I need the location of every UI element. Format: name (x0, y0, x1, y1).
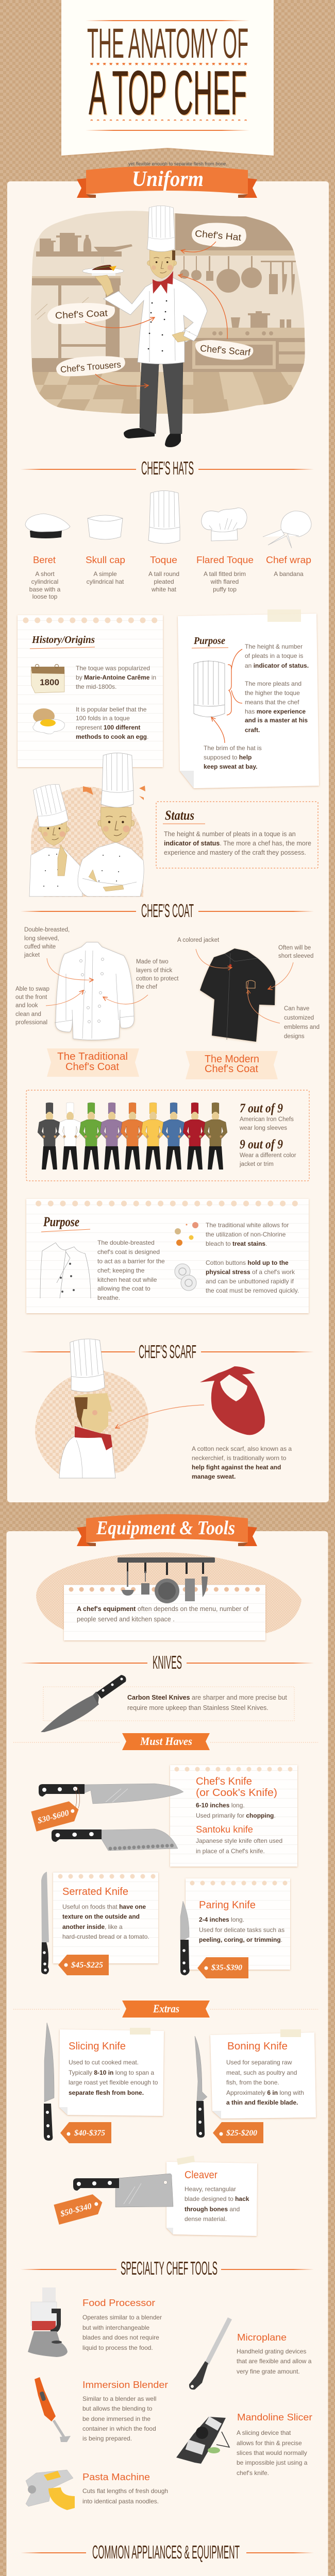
note: cleaver: dense material. (185, 2215, 227, 2223)
icon: cleaver knife (73, 2174, 173, 2207)
hat types (25, 490, 311, 600)
text: scarf description: help fight against the heat and (192, 1464, 281, 1471)
left chef (29, 783, 82, 896)
panel: coat purpose note: Purpose (43, 1214, 79, 1229)
hat descriptions: pleated (154, 578, 174, 585)
coat callouts: long sleeved, (24, 936, 59, 942)
hat (147, 206, 175, 251)
tool: mandoline slicer: chef's knife. (237, 2469, 269, 2477)
illustration: two chefs (29, 753, 145, 897)
heading: chef's coat: CHEF'S COAT (141, 900, 194, 921)
coat callouts: Double-breasted, (24, 927, 70, 933)
panel: history/origins note: methods to cook an egg. (76, 733, 148, 740)
callout: chef's hat (181, 223, 246, 252)
text: scarf description (192, 1445, 292, 1480)
tool: immersion blender (35, 2377, 168, 2442)
coat callouts: jacket (24, 952, 40, 958)
hat names: Beret (33, 555, 56, 565)
panel: coat purpose note (26, 1199, 309, 1313)
callout: chef's trousers: Chef's Trousers (60, 360, 122, 375)
note: slicing knife: Typically 8-10 in long to span a (69, 2069, 154, 2076)
panel: coat purpose note: allowing the coat to (97, 1285, 150, 1292)
right chef (78, 753, 144, 896)
note: chef's knife and santoku (170, 1765, 297, 1867)
illustration: traditional coat (55, 942, 134, 1040)
panel: purpose note: means that the chef (245, 699, 299, 706)
callout: status: experience and mastery of the craft they possess. (164, 849, 306, 856)
note: cleaver: Heavy, rectangular (185, 2185, 236, 2193)
hat descriptions: base with a (29, 586, 61, 593)
panel: history/origins note (18, 615, 163, 767)
banner: modern coat: The Modern (205, 1054, 259, 1065)
hat descriptions: A tall round (148, 570, 179, 578)
note: chef's knife and santoku: Chef's Knife (196, 1776, 252, 1787)
note: serrated knife: texture on the outside and (62, 1913, 140, 1920)
panel: coat purpose note: Cotton buttons hold up to the (206, 1259, 289, 1266)
icon: skull cap (88, 515, 123, 539)
equipment intro: A chef's equipment often depends on the menu, number of (77, 1605, 249, 1613)
panel: coat purpose note: The traditional white allows for (206, 1222, 289, 1229)
icon: paring knife (180, 1901, 190, 1975)
note: serrated knife: another inside, like a (62, 1923, 123, 1930)
panel: history/origins note: The toque was popularized (76, 665, 150, 672)
note: boning knife: Used for separating raw (226, 2059, 292, 2066)
heading: chef's scarf: CHEF'S SCARF (139, 1341, 196, 1362)
note: serrated knife: hard-crusted bread or a tomato. (62, 1933, 149, 1940)
hat descriptions: white hat (151, 586, 177, 593)
tool: immersion blender: Immersion Blender (82, 2380, 168, 2390)
note: chef's knife and santoku: Santoku knife (196, 1824, 253, 1835)
tool: mandoline slicer: be impossible just using a (237, 2459, 308, 2466)
panel: coat purpose note: kitchen heat out while (97, 1276, 157, 1283)
price tag: 35-390 (197, 1957, 248, 1978)
panel: equipment and tools (6, 1531, 328, 2576)
coat callouts: Able to swap (15, 986, 49, 992)
tool: immersion blender: be done immersed in the (82, 2415, 150, 2422)
panel: coat purpose note: physical stress of a chef's work (206, 1268, 295, 1276)
price tag: 25-200 (213, 2122, 263, 2143)
icon: calendar (31, 665, 64, 693)
price tag: 45-225 (58, 1955, 109, 1975)
coat callouts: customized (284, 1015, 314, 1021)
icon: utensil rack (118, 1557, 215, 1603)
hat descriptions: A bandana (274, 570, 304, 578)
hat descriptions: loose top (32, 593, 58, 600)
hero kitchen scene (26, 206, 314, 417)
note: slicing knife: Used to cut cooked meat. (69, 2059, 139, 2066)
trousers (140, 361, 183, 434)
note: paring knife: Paring Knife (199, 1900, 256, 1911)
coat callouts: professional (15, 1020, 47, 1026)
head (147, 250, 177, 279)
ribbon: uniform: Uniform (132, 167, 204, 191)
tool: microplane: very fine grate amount. (237, 2368, 300, 2375)
plate and steak (82, 268, 124, 274)
note: boning knife: a thin and flexible blade. (226, 2099, 298, 2106)
price tag: 25-200: $25-$200 (226, 2129, 257, 2138)
illustration: modern black coat (200, 948, 275, 1042)
heading: knives: KNIVES (153, 1652, 182, 1673)
banner: modern coat (186, 1051, 278, 1079)
coat callouts (15, 927, 320, 1040)
panel: history/origins note: It is popular belief that the (76, 706, 147, 713)
note: serrated knife (41, 1872, 158, 1975)
note: slicing knife: large roast yet flexible enough to (69, 2079, 158, 2086)
tool: food processor: liquid to process the food. (82, 2344, 153, 2351)
callout: chef's coat: Chef's Coat (55, 308, 108, 321)
tool: pasta machine: Pasta Machine (82, 2472, 150, 2482)
note: serrated knife: Useful on foods that have one (62, 1903, 146, 1910)
note: chef's knife and santoku: in place of a Chef's knife. (196, 1848, 265, 1855)
callout: chef's coat (47, 303, 155, 328)
icon: serrated knife (41, 1872, 49, 1974)
hat names (33, 555, 311, 565)
panel: purpose note: of pleats in a toque is (245, 652, 303, 659)
panel: history/origins note: 100 folds in a toque (76, 715, 130, 722)
panel: uniform (7, 181, 329, 1502)
divider banner: extras: Extras (153, 2002, 179, 2015)
note: paring knife: peeling, coring, or trimming. (199, 1936, 282, 1943)
note: cleaver: blade designed to hack (185, 2195, 249, 2202)
coat callouts: emblems and (284, 1024, 320, 1030)
coat callouts: designs (284, 1033, 305, 1040)
note: chef's knife and santoku: 6-10 inches long. (196, 1802, 245, 1809)
equipment intro: people served and kitchen space . (77, 1616, 175, 1623)
panel: purpose note: an indicator of status. (245, 662, 309, 669)
note: slicing knife (44, 2023, 164, 2143)
callout: carbon steel knives: require more upkeep than Stainless Steel Knives. (127, 1704, 269, 1711)
equipment intro (36, 1552, 301, 1640)
panel: coat purpose note: bleach to treat stains. (206, 1240, 267, 1247)
tool: food processor: blades and does not require (82, 2334, 159, 2341)
panel: purpose note: Purpose (193, 635, 225, 647)
icon: toque sketch (194, 660, 225, 717)
icon: flared toque (202, 508, 247, 541)
banner: traditional coat: The Traditional (57, 1051, 128, 1062)
tool: microplane: Handheld grating devices (237, 2348, 306, 2355)
icon: toque (148, 490, 180, 544)
icon: slicing knife (44, 2023, 54, 2141)
callout: chef's scarf: Chef's Scarf (199, 343, 252, 358)
callout: status: indicator of status. The more a chef has, the more (164, 840, 311, 847)
illustration: profile chef with scarf (35, 1338, 204, 1478)
hat descriptions (29, 570, 304, 600)
tool: food processor: Operates similar to a blender (82, 2314, 162, 2321)
tool: food processor: but with interchangeable (82, 2324, 149, 2331)
panel: purpose note: the higher the toque (245, 689, 300, 697)
tool: pasta machine: Cuts flat lengths of fresh dough (82, 2487, 168, 2495)
panel: history/origins note: represent 100 different (76, 724, 140, 731)
shoes (124, 428, 181, 447)
panel: iron chefs: jacket or trim (239, 1161, 274, 1167)
divider banner: extras (13, 2001, 318, 2018)
panel: coat purpose note: chef's coat is designed (97, 1248, 160, 1256)
note: paring knife: 2-4 inches long. (199, 1916, 244, 1923)
panel: coat purpose note: the utilization of non-Chlorine (206, 1231, 286, 1238)
callout: status: Status (165, 808, 194, 823)
hat descriptions: A tall fitted brim (204, 570, 246, 578)
note: boning knife: Boning Knife (227, 2041, 288, 2052)
tool: immersion blender: container in which the food (82, 2425, 156, 2432)
panel: coat purpose note: to act as a barrier for the (97, 1258, 165, 1265)
callout: carbon steel knives: Carbon Steel Knives are sharper and more precise but (127, 1694, 287, 1701)
callout: status: The height & number of pleats in a toque is an (164, 831, 296, 838)
hat descriptions: puffy top (213, 586, 237, 593)
ribbon: uniform (77, 166, 257, 198)
icon: buttons (175, 1264, 196, 1291)
text: scarf description: manage sweat. (192, 1473, 236, 1480)
callout: chef's hat: Chef's Hat (194, 228, 242, 243)
tool: immersion blender: Similar to a blender as well (82, 2395, 156, 2402)
price tag: 40-375 (60, 2122, 111, 2143)
hat descriptions: cylindrical (31, 578, 58, 585)
heading: chef's hats: CHEF'S HATS (141, 457, 194, 479)
panel: coat purpose note: breathe. (97, 1294, 120, 1301)
hat names: Flared Toque (196, 555, 254, 565)
divider banner: must haves: Must Haves (140, 1735, 192, 1748)
panel: history/origins note: History/Origins (31, 634, 95, 646)
banner: modern coat: Chef's Coat (205, 1063, 258, 1075)
note: serrated knife: Serrated Knife (62, 1886, 128, 1897)
note: boning knife: fish, from the bone. (226, 2079, 279, 2086)
price tag: 50-340 (54, 2193, 105, 2225)
ribbon: equipment and tools: Equipment & Tools (96, 1517, 235, 1539)
tool: pasta machine: into identical pasta noodles. (82, 2498, 159, 2505)
hat names: Skull cap (86, 555, 125, 565)
tool: microplane (189, 2318, 312, 2389)
coat callouts: clean and (15, 1011, 41, 1018)
stray caption: yet flexible enough to separate flesh from bone. (128, 161, 227, 166)
note: slicing knife: separate flesh from bone. (69, 2089, 144, 2096)
tool: mandoline slicer: Mandoline Slicer (237, 2412, 312, 2422)
text: scarf description: A cotton neck scarf, also known as a (192, 1445, 292, 1452)
panel: iron chefs: 7 out of 9 (240, 1101, 283, 1115)
panel: purpose note: supposed to help (204, 754, 252, 761)
tool: immersion blender: is being prepared. (82, 2435, 132, 2442)
hat descriptions: A simple (93, 570, 117, 578)
note: paring knife: Used for delicate tasks such as (199, 1926, 284, 1934)
coat callouts: Often will be (278, 945, 311, 951)
coat callouts: cotton to protect (136, 976, 179, 982)
panel: iron chefs (26, 1090, 309, 1181)
callout: chef's trousers (56, 356, 148, 386)
coat callouts: cuffed white (24, 944, 56, 950)
tool: microplane: Microplane (237, 2332, 287, 2343)
icon: chef knife diagonal (41, 1675, 126, 1732)
panel: purpose note: The height & number (245, 643, 303, 650)
icon: egg (33, 708, 64, 734)
panel: history/origins note: by Marie-Antoine Carême in (76, 674, 156, 681)
divider banner: must haves (13, 1733, 318, 1750)
right hand (172, 332, 190, 342)
icon: santoku knife (52, 1829, 178, 1851)
panel: purpose note: The more pleats and (245, 680, 301, 687)
price tag: 30-600 (31, 1800, 81, 1832)
icon: chef wrap (263, 511, 311, 548)
note: chef's knife and santoku: Used primarily for chopping. (196, 1812, 276, 1819)
panel: purpose note: keep sweat at bay. (204, 763, 258, 770)
row of nine chefs (38, 1103, 227, 1170)
coat callouts: and look (15, 1003, 38, 1009)
icon: boning knife (195, 2036, 207, 2138)
panel: coat purpose note: chef; keeping the (97, 1267, 145, 1274)
coat (104, 278, 207, 364)
coat callouts: Made of two (136, 959, 169, 965)
coat callouts: the chef (136, 984, 158, 990)
text: scarf description: neckerchief, is traditionally worn to (192, 1454, 287, 1462)
panel: coat purpose note: and can be unbuttoned rapidly if (206, 1278, 294, 1285)
icon: bandana (200, 1366, 265, 1435)
brace and arrows (227, 649, 242, 715)
panel: purpose note (178, 609, 319, 788)
tool: mandoline slicer (176, 2412, 312, 2477)
note: chef's knife and santoku: (or Cook's Knife) (196, 1787, 277, 1799)
note: boning knife (195, 2029, 316, 2143)
tool: microplane: that are flexible and allow a (237, 2358, 312, 2365)
panel: purpose note: craft. (245, 726, 260, 734)
icon: coat sketch (40, 1243, 91, 1298)
panel: iron chefs: 9 out of 9 (240, 1138, 283, 1151)
coat callouts: out the front (15, 994, 47, 1001)
title card (61, 0, 274, 156)
coat callouts: A colored jacket (177, 937, 220, 943)
tool: mandoline slicer: slices that would normally (237, 2449, 307, 2456)
price tag: 35-390: $35-$390 (211, 1963, 242, 1972)
panel: purpose note: and is a master at his (245, 717, 308, 724)
price tag: 30-600: $30-$600 (36, 1809, 70, 1825)
note: cleaver (54, 2156, 257, 2236)
note: chef's knife and santoku: Japanese style knife often used (196, 1837, 282, 1844)
hat descriptions: cylindrical hat (87, 578, 124, 585)
panel: coat purpose note: the coat must be removed quickly. (206, 1287, 299, 1294)
price tag: 45-225: $45-$225 (71, 1961, 103, 1970)
icon: calendar: 1800 (40, 677, 59, 687)
note: cleaver: through bones and (185, 2206, 240, 2213)
callout: carbon steel knives (41, 1675, 294, 1732)
tool: mandoline slicer: allows for thin & precise (237, 2439, 302, 2447)
note: paring knife (180, 1878, 290, 1978)
hat descriptions: A short (35, 570, 55, 578)
tool: immersion blender: but allows the blending to (82, 2405, 153, 2412)
panel: purpose note: The brim of the hat is (204, 744, 262, 752)
coat callouts: layers of thick (136, 968, 173, 974)
surprise marks (83, 786, 145, 800)
price tag: 50-340: $50-$340 (59, 2202, 93, 2218)
panel: iron chefs: Wear a different color (240, 1153, 296, 1159)
note: boning knife: Approximately 6 in long with (226, 2089, 304, 2096)
panel: iron chefs: American Iron Chefs (240, 1116, 294, 1123)
note: boning knife: meat, such as poultry and (226, 2069, 297, 2076)
panel: iron chefs: wear long sleeves (239, 1125, 287, 1131)
red scarf (153, 271, 173, 294)
tool: mandoline slicer: A slicing device that (237, 2429, 291, 2436)
note: slicing knife: Slicing Knife (69, 2041, 126, 2052)
icon: beret (25, 514, 70, 538)
panel: coat purpose note: The double-breasted (97, 1239, 155, 1246)
callout: status (156, 802, 318, 868)
banner: traditional coat (47, 1048, 139, 1077)
tool: pasta machine (26, 2470, 168, 2510)
panel: purpose note: has more experience (245, 708, 306, 715)
price tag: 40-375: $40-$375 (74, 2129, 105, 2138)
icon: chef's knife (39, 1784, 183, 1808)
panel: history/origins note: the mid-1800s. (76, 683, 116, 690)
hat descriptions: with flared (210, 578, 239, 585)
icon: stains (175, 1222, 198, 1246)
hero chef figure (82, 206, 207, 447)
hat names: Chef wrap (266, 555, 311, 565)
coat callouts: Can have (284, 1006, 309, 1012)
tool: food processor (28, 2287, 162, 2357)
note: cleaver: Cleaver (185, 2170, 217, 2181)
ribbon: equipment and tools (77, 1514, 257, 1546)
banner: traditional coat: Chef's Coat (65, 1061, 119, 1073)
coat callouts: short sleeved (278, 953, 313, 959)
tool: food processor: Food Processor (82, 2298, 155, 2308)
callout: chef's scarf (178, 275, 253, 360)
raised hand (95, 275, 113, 296)
hat names: Toque (150, 555, 177, 565)
